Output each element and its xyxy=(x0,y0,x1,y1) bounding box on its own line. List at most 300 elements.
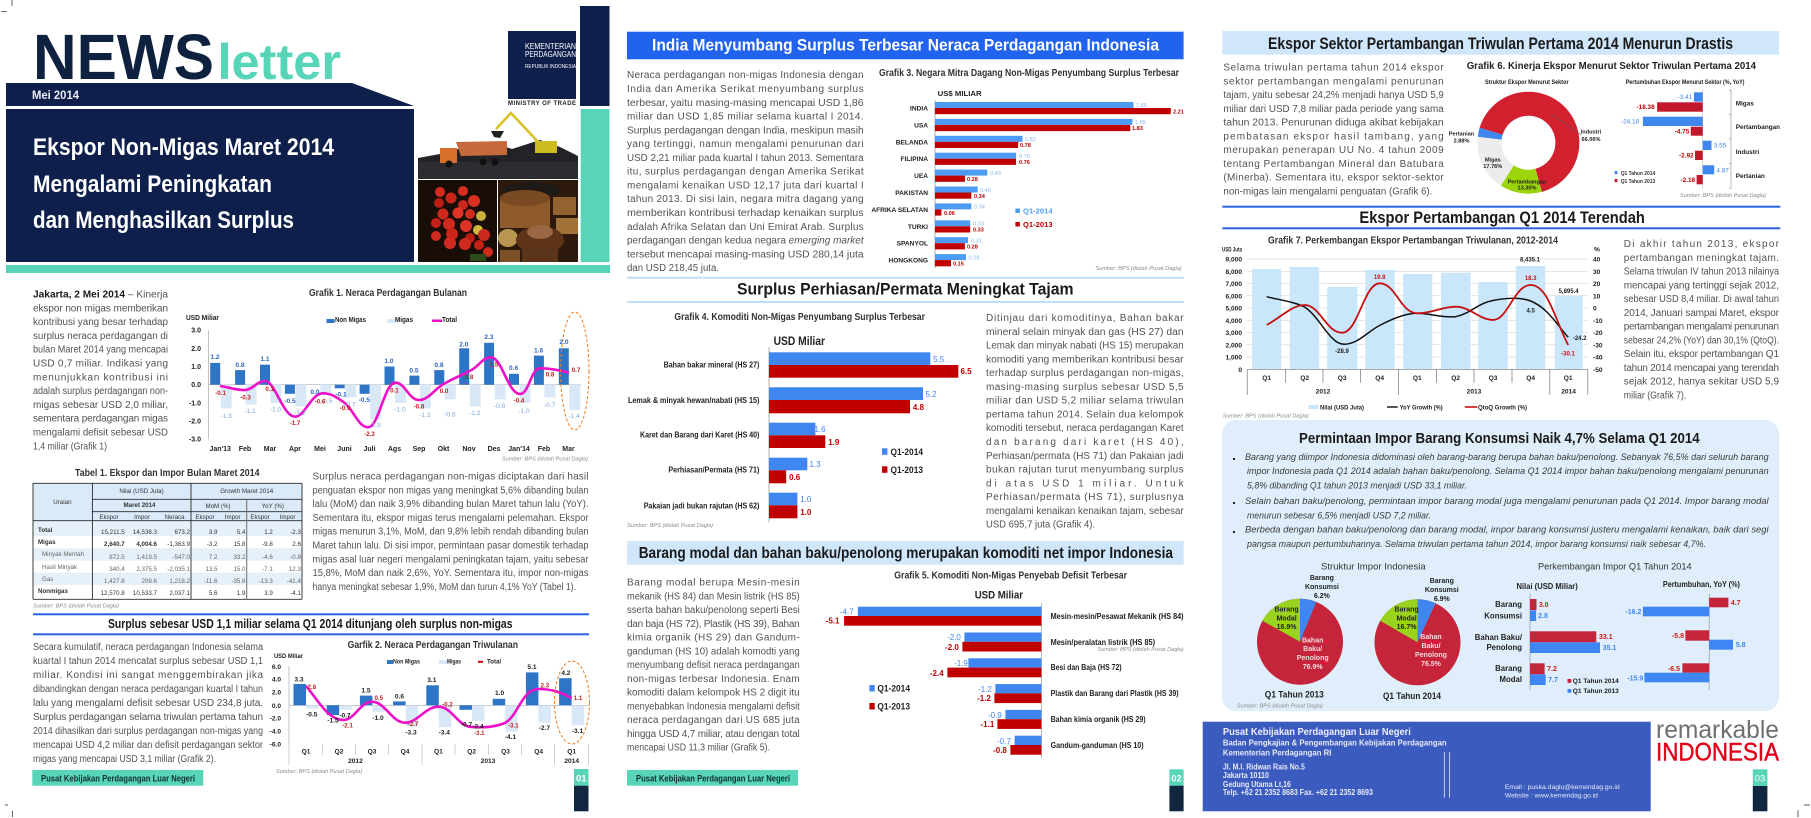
page number 02 xyxy=(1169,769,1184,811)
chart 6: export structure donut and growth bars: Pertambangan xyxy=(1508,180,1547,186)
chart 2: quarterly trade balance: Q4 xyxy=(401,748,410,756)
chart 2: quarterly trade balance: Migas xyxy=(447,658,461,666)
chart 6: export structure donut and growth bars xyxy=(1449,60,1780,199)
pie charts: import structure: Bahan xyxy=(1302,638,1323,644)
pie charts: import structure: Bahan xyxy=(1420,634,1442,641)
bar charts: import development: 7.7 xyxy=(1548,677,1558,684)
chart 4: non-migas surplus commodities: Pakaian jadi bukan rajutan (HS 62) xyxy=(644,502,760,510)
chart 3: partner countries: Q1-2013 xyxy=(1023,220,1053,229)
pie charts: import structure: 16.7% xyxy=(1397,624,1417,631)
chart 2: quarterly trade balance: -3.1 xyxy=(572,728,584,735)
chart 1: monthly trade balance: Okt xyxy=(438,446,450,453)
chart 6: export structure donut and growth bars: 4.87 xyxy=(1716,167,1729,174)
paragraph: mining sector xyxy=(1223,62,1444,197)
pie charts: import structure: 16.9% xyxy=(1277,624,1297,631)
page number 03: 03 xyxy=(1755,774,1765,784)
paragraph: partner countries: dan USD 218,45 juta. xyxy=(627,263,719,274)
chart 1: monthly trade balance: -0.8 xyxy=(494,403,506,410)
paragraph: commodities: mineral selain minyak dan gas (HS 27) dan xyxy=(986,327,1184,338)
chart 7: mining exports 2012-2014: 5,000 xyxy=(1225,306,1242,312)
paragraph: commodities: dan barang dari karet (HS 40), xyxy=(986,437,1184,448)
paragraph: capital goods: menyumbang defisit neraca perdagangan xyxy=(627,660,800,671)
chart 6: export structure donut and growth bars: Q1 Tahun 2014 xyxy=(1621,171,1656,177)
chart 3: partner countries: 0.78 xyxy=(1020,143,1031,149)
chart 5: deficit commodities: -0.9 xyxy=(988,711,1002,720)
chart 6: export structure donut and growth bars: Sumber: BPS (diolah Pusat Dagla) xyxy=(1680,193,1766,199)
chart 3: partner countries: 0.33 xyxy=(973,228,984,234)
paragraph: surplus non-migas xyxy=(312,472,589,593)
chart 1: monthly trade balance: 1.2 xyxy=(210,354,220,361)
chart 1: monthly trade balance: 0.8 xyxy=(434,362,444,369)
table 1: exports and imports March 2014: Impor xyxy=(280,514,296,521)
chart 1: monthly trade balance: -1.0 xyxy=(270,406,282,414)
paragraph: surplus non-migas: Maret tahun lalu. Di sisi impor, permintaan pasar domestik terhadap xyxy=(312,540,589,552)
page number 02: 02 xyxy=(1171,774,1182,784)
contact footer: Telp. +62 21 2352 8683 Fax. +62 21 2352 8693 xyxy=(1223,788,1373,797)
chart 1: monthly trade balance: -1.0 xyxy=(518,408,530,415)
pie charts: import structure: 6.2% xyxy=(1314,593,1331,600)
chart 2: quarterly trade balance: Total xyxy=(487,658,501,666)
chart 5: deficit commodities: -1.1 xyxy=(981,720,995,729)
paragraph: end of 2013 xyxy=(1624,239,1780,402)
chart 1: monthly trade balance: -1.1 xyxy=(244,408,256,415)
chart 1: monthly trade balance: Feb xyxy=(538,446,550,453)
table 1: exports and imports March 2014: 13.5 xyxy=(205,566,218,573)
chart 6: export structure donut and growth bars: 66.06% xyxy=(1582,137,1601,143)
banner heading: India xyxy=(627,32,1184,59)
chart 7: mining exports 2012-2014: 6,000 xyxy=(1225,293,1242,300)
bar charts: import development: Q1 Tahun 2014 xyxy=(1573,678,1619,685)
pie charts: import structure: Konsumsi xyxy=(1305,584,1339,591)
chart 7: mining exports 2012-2014: 4.5 xyxy=(1527,308,1536,314)
chart 3: partner countries: 0.06 xyxy=(944,211,955,217)
table 1: exports and imports March 2014: 14,538.3 xyxy=(133,529,158,536)
intro paragraph: migas sebesar USD 2,0 miliar, xyxy=(33,400,168,411)
chart 2: quarterly trade balance: 1.0 xyxy=(495,690,505,697)
table 1: exports and imports March 2014: 1.2 xyxy=(264,529,273,536)
table 1: exports and imports March 2014: 2,640.7 xyxy=(104,541,125,548)
paragraph: partner countries: perdagangan dengan kedua negara emerging market xyxy=(627,236,865,247)
chart 1: monthly trade balance: Mar xyxy=(562,446,575,453)
paragraph: mining sector: tentang Pertambangan Mineral dan Batubara xyxy=(1223,159,1444,170)
chart 1: monthly trade balance: -1.0 xyxy=(189,400,201,408)
chart 2: quarterly trade balance: 5.1 xyxy=(527,664,537,671)
table 1: exports and imports March 2014: Neraca xyxy=(165,514,185,521)
chart 6: export structure donut and growth bars: 3.55 xyxy=(1714,142,1727,150)
chart 5: deficit commodities: -2.0 xyxy=(945,643,959,652)
chart 2: quarterly trade balance: -2.1 xyxy=(342,722,353,730)
chart 7: mining exports 2012-2014: Nilai (USD Juta) xyxy=(1320,404,1364,412)
pie charts: import structure: 76.9% xyxy=(1303,664,1323,671)
chart 2: quarterly trade balance: -3.3 xyxy=(405,730,417,736)
pie charts: import structure: Barang xyxy=(1430,578,1454,585)
contact footer: Email : puska.daglu@kemendag.go.id xyxy=(1505,784,1620,791)
paragraph: capital goods: mencapai USD 11,3 miliar (Grafik 5). xyxy=(627,742,770,754)
pie charts: import structure: 6.9% xyxy=(1434,596,1451,603)
chart 6: export structure donut and growth bars: Migas xyxy=(1736,100,1754,108)
chart 1: monthly trade balance: -0.8 xyxy=(444,412,456,418)
chart 2: quarterly trade balance: Garfik 2. Neraca Perdagangan Triwulanan xyxy=(348,640,518,651)
table 1: exports and imports March 2014: 7.2 xyxy=(209,554,218,561)
chart 5: deficit commodities: Q1-2013 xyxy=(877,702,910,712)
paragraph: mining sector: sektor pertambangan mengalami penurunan xyxy=(1223,76,1444,87)
chart 3: partner countries: 2.21 xyxy=(1173,110,1184,116)
paragraph: capital goods: mekanik (HS 84) dan Mesin listrik (HS 85) xyxy=(627,591,800,602)
chart 7: mining exports 2012-2014: QtoQ Growth (%) xyxy=(1478,404,1527,412)
footer label page 1: Pusat Kebijakan Perdagangan Luar Negeri xyxy=(41,774,195,784)
chart 7: mining exports 2012-2014: -28.9 xyxy=(1335,349,1349,355)
chart 7: mining exports 2012-2014: -40 xyxy=(1593,355,1603,362)
banner heading: capital goods: Barang modal dan bahan baku/penolong merupakan komoditi net impor Indonesia xyxy=(639,545,1173,562)
chart 3: partner countries: TURKI xyxy=(908,224,928,231)
pie charts: import structure: Baku/ xyxy=(1421,643,1441,650)
chart 7: mining exports 2012-2014: 3,000 xyxy=(1225,330,1242,337)
table 1: exports and imports March 2014: 12.3 xyxy=(289,566,301,573)
bar charts: import development: Perkembangan Impor Q1 Tahun 2014 xyxy=(1538,562,1692,572)
chart 1: monthly trade balance: 3.0 xyxy=(191,328,201,334)
paragraph: partner countries: mengalami kenaikan USD 12,17 juta dari kuartal I xyxy=(627,180,864,191)
table 1: exports and imports March 2014: -41.4 xyxy=(287,578,301,585)
chart 1: monthly trade balance: -1.4 xyxy=(568,413,580,420)
chart 3: partner countries: 1.83 xyxy=(1132,126,1143,132)
contact footer: Website : www.kemendag.go.id xyxy=(1505,792,1598,800)
banner heading: mining exports: Ekspor Sektor Pertambangan Triwulan Pertama 2014 Menurun Drastis xyxy=(1268,35,1733,53)
chart 4: non-migas surplus commodities: Bahan bakar mineral (HS 27) xyxy=(664,360,760,370)
chart 2: quarterly trade balance xyxy=(270,640,590,775)
chart 4: non-migas surplus commodities: Q1-2013 xyxy=(890,465,923,476)
paragraph: capital goods: non-migas terbesar Indonesia. Enam xyxy=(627,674,800,685)
bar charts: import development: Pertumbuhan, YoY (%) xyxy=(1663,580,1740,589)
photo: red coffee berries xyxy=(418,180,497,262)
chart 3: partner countries: 0.29 xyxy=(968,256,979,262)
table 1: exports and imports March 2014: 1,218.2 xyxy=(169,578,191,585)
table 1: exports and imports March 2014: -35.8 xyxy=(231,578,246,585)
paragraph: cumulative balance: migas yang mencapai USD 3,1 miliar (Grafik 2). xyxy=(33,754,216,765)
chart 4: non-migas surplus commodities: Grafik 4. Komoditi Non-Migas Penyumbang Surplus Terbesar xyxy=(674,312,925,323)
chart 1: monthly trade balance: Jan'14 xyxy=(508,446,530,453)
chart 7: mining exports 2012-2014: 9,000 xyxy=(1225,256,1242,264)
chart 1: monthly trade balance: Grafik 1. Neraca Perdagangan Bulanan xyxy=(309,288,467,299)
paragraph: partner countries: yang tertinggi, namun mengalami penurunan dari xyxy=(627,139,864,150)
bar charts: import development: Penolong xyxy=(1486,643,1522,652)
chart 6: export structure donut and growth bars: -18.38 xyxy=(1637,104,1655,111)
table 1: exports and imports March 2014: -9.8 xyxy=(262,541,273,548)
chart 3: partner countries: 0.28 xyxy=(967,244,978,250)
paragraph: partner countries: tersebut mencapai masing-masing USD 280,14 juta xyxy=(627,249,864,260)
ministry logo: KEMENTERIAN xyxy=(525,41,576,51)
paragraph: capital goods: kimia organik (HS 29) dan Gandum- xyxy=(627,632,800,644)
contact footer: Jakarta 10110 xyxy=(1223,771,1269,780)
chart 7: mining exports 2012-2014: % xyxy=(1594,246,1600,254)
ministry logo: PERDAGANGAN xyxy=(525,49,576,59)
chart 6: export structure donut and growth bars: Pertumbuhan Ekspor Menurut Sektor (%, YoY) xyxy=(1626,79,1744,86)
chart 6: export structure donut and growth bars: Pertanian xyxy=(1449,132,1475,138)
chart 6: export structure donut and growth bars: Industri xyxy=(1736,149,1759,156)
chart 2: quarterly trade balance: 3.1 xyxy=(427,677,437,684)
chart 2: quarterly trade balance: -0.7 xyxy=(339,712,351,720)
chart 1: monthly trade balance: 1.6 xyxy=(534,348,544,354)
chart 1: monthly trade balance: 0.1 xyxy=(265,386,275,393)
bar charts: import development: Konsumsi xyxy=(1484,612,1522,620)
chart 7: mining exports 2012-2014: Q1 xyxy=(1262,375,1271,382)
section heading: surplus Q1 2014: Surplus sebesar USD 1,1 miliar selama Q1 2014 ditunjang oleh surplus non-migas xyxy=(108,616,512,631)
chart 3: partner countries xyxy=(871,68,1184,272)
paragraph: end of 2013: Di akhir tahun 2013, ekspor xyxy=(1624,239,1780,250)
chart 6: export structure donut and growth bars: Pertanian xyxy=(1736,173,1765,180)
chart 1: monthly trade balance: -1.2 xyxy=(294,410,306,417)
chart 3: partner countries: UEA xyxy=(914,173,928,180)
chart 4: non-migas surplus commodities: Perhiasan/Permata (HS 71) xyxy=(668,466,760,474)
paragraph: mining sector: (Minerba). Sementara itu, ekspor sektor-sektor xyxy=(1223,172,1444,184)
chart 7: mining exports 2012-2014: 0 xyxy=(1593,306,1597,312)
chart 2: quarterly trade balance: Sumber: BPS (diolah Pusat Dagla) xyxy=(276,769,362,775)
paragraph: partner countries: USD 2,21 miliar pada kuartal I tahun 2013. Sementara xyxy=(627,153,864,164)
paragraph: cumulative balance: 2014 dihasilkan dari surplus perdagangan non-migas yang xyxy=(33,726,263,737)
chart 3: partner countries: 1.85 xyxy=(1135,120,1146,126)
chart 7: mining exports 2012-2014: -10 xyxy=(1593,318,1603,325)
contact footer: Gedung Utama Lt,16 xyxy=(1223,780,1291,789)
table 1: exports and imports March 2014: 2,375.5 xyxy=(136,566,158,573)
chart 5: deficit commodities: Plastik dan Barang dari Plastik (HS 39) xyxy=(1051,689,1179,698)
chart 5: deficit commodities: Q1-2014 xyxy=(877,684,911,694)
chart 1: monthly trade balance: 0.6 xyxy=(509,365,519,372)
paragraph: cumulative balance: kuartal I tahun 2014 mencatat surplus sebesar USD 1,1 xyxy=(33,656,263,667)
table 1: exports and imports March 2014: -0.8 xyxy=(290,554,301,561)
chart 7: mining exports 2012-2014: Q3 xyxy=(1338,375,1347,382)
table 1: exports and imports March 2014: -4.6 xyxy=(262,554,273,561)
bar charts: import development: Barang xyxy=(1495,664,1522,673)
paragraph: end of 2013: pertambangan meningkat tajam. xyxy=(1624,253,1779,264)
chart 7: mining exports 2012-2014: Q1 xyxy=(1413,375,1422,382)
chart 1: monthly trade balance: USD Miliar xyxy=(186,315,219,322)
chart 1: monthly trade balance: -0.7 xyxy=(344,402,356,408)
paragraph: partner countries: miliar dan USD 1,85 miliar selama kuartal I 2014. xyxy=(627,112,864,122)
pie charts: import structure: Konsumsi xyxy=(1425,587,1459,594)
chart 4: non-migas surplus commodities: 4.8 xyxy=(913,403,925,412)
table 1: exports and imports March 2014: YoY (%) xyxy=(262,503,284,510)
chart 1: monthly trade balance: -0.5 xyxy=(359,397,370,404)
table 1: exports and imports March 2014: 1,427.8 xyxy=(104,578,125,585)
bar charts: import development: Q1 Tahun 2013 xyxy=(1573,688,1619,695)
footer label page 2: Pusat Kebijakan Perdagangan Luar Negeri xyxy=(636,774,790,784)
paragraph: mining sector: non-migas lain mengalami penguatan (Grafik 6). xyxy=(1223,186,1432,197)
chart 3: partner countries: Q1-2014 xyxy=(1023,206,1053,216)
chart 1: monthly trade balance: Feb xyxy=(239,446,251,453)
chart 1: monthly trade balance: 0.0 xyxy=(310,389,320,396)
pie charts: import structure: Q1 Tahun 2013 xyxy=(1265,690,1324,700)
chart 7: mining exports 2012-2014: YoY Growth (%) xyxy=(1400,404,1443,412)
paragraph: surplus non-migas: penguatan ekspor non migas yang meningkat 5,6% dibanding bulan xyxy=(312,485,588,496)
table 1: exports and imports March 2014: -7.1 xyxy=(262,566,273,573)
chart 3: partner countries: Sumber: BPS (diolah Pusat Dagla) xyxy=(1095,266,1182,272)
chart 1: monthly trade balance: 2.3 xyxy=(484,334,494,341)
paragraph: commodities: Ditinjau dari komoditinya, Bahan bakar xyxy=(986,313,1184,324)
masthead NEWSletter xyxy=(33,21,341,93)
ministry logo: MINISTRY OF TRADE xyxy=(508,101,576,107)
paragraph: surplus non-migas: 15,8%, MoM dan naik 2,6%, YoY. Sementara itu, impor non-migas xyxy=(312,568,588,579)
intro paragraph: kontribusi yang besar terhadap xyxy=(33,317,168,328)
paragraph: commodities: miliar dan USD 5,2 miliar selama triwulan xyxy=(986,396,1184,407)
bar charts: import development: Nilai (USD Miliar) xyxy=(1516,582,1578,591)
contact footer: Kementerian Perdagangan RI xyxy=(1223,748,1331,758)
table 1: exports and imports March 2014: 872.5 xyxy=(109,554,125,561)
paragraph: partner countries: India dan Amerika Serikat menyumbang surplus xyxy=(627,84,864,95)
table 1: exports and imports March 2014: Uraian xyxy=(53,499,72,506)
intro paragraph: surplus neraca perdagangan di xyxy=(33,331,168,342)
chart 4: non-migas surplus commodities: 1.0 xyxy=(800,495,812,504)
paragraph: mining sector: Selama triwulan pertama tahun 2014 ekspor xyxy=(1223,62,1444,74)
chart 7: mining exports 2012-2014: 2012 xyxy=(1316,388,1331,396)
table 1: exports and imports March 2014: 3.9 xyxy=(264,590,273,597)
paragraph: surplus non-migas: Surplus neraca perdagangan non-migas diciptakan dari hasil xyxy=(312,472,588,482)
chart 4: non-migas surplus commodities: 5.2 xyxy=(925,390,937,399)
pie charts: import structure: Modal xyxy=(1276,616,1297,622)
chart 4: non-migas surplus commodities: 6.5 xyxy=(960,367,972,376)
chart 3: partner countries: INDIA xyxy=(910,106,928,112)
table 1: exports and imports March 2014: 673.2 xyxy=(175,529,191,536)
headline block xyxy=(6,109,414,262)
chart 1: monthly trade balance: 0.8 xyxy=(235,362,245,369)
paragraph: partner countries: tahun 2013. Di sisi lain, negara mitra dagang yang xyxy=(627,194,864,205)
paragraph: partner countries: Neraca perdagangan non-migas Indonesia dengan xyxy=(627,70,864,81)
paragraph: capital goods: dan baja (HS 72), Plastik (HS 39), Bahan xyxy=(627,619,800,630)
chart 5: deficit commodities: -1.2 xyxy=(977,694,991,703)
intro paragraph: bulan Maret 2014 yang mencapai xyxy=(33,345,168,356)
table 1: exports and imports March 2014: Maret 2014 xyxy=(124,502,156,509)
panel: consumer goods imports xyxy=(1222,420,1779,711)
paragraph: commodities: USD 695,7 juta (Grafik 4). xyxy=(986,520,1095,531)
chart 3: partner countries: FILIPINA xyxy=(901,156,928,163)
chart 1: monthly trade balance: Nov xyxy=(462,446,476,453)
chart 2: quarterly trade balance: 6.0 xyxy=(272,664,281,671)
chart 2: quarterly trade balance: 1.1 xyxy=(574,695,583,702)
paragraph: partner countries: terbesar, yaitu masing-masing mencapai USD 1,86 xyxy=(627,98,864,109)
paragraph: surplus non-migas: lalu (MoM) dan naik 3,9% dibanding bulan Maret tahun lalu (YoY). xyxy=(312,499,588,510)
chart 1: monthly trade balance: -0.1 xyxy=(335,392,347,398)
chart 2: quarterly trade balance: -2.7 xyxy=(539,725,550,732)
paragraph: mining sector: tahun 2013. Penurunan diduga akibat kebijakan xyxy=(1223,118,1444,128)
paragraph: capital goods: ganduman (HS 10) adalah komodti yang xyxy=(627,646,800,657)
chart 6: export structure donut and growth bars: Migas xyxy=(1485,158,1501,164)
table 1: exports and imports March 2014: Ekspor xyxy=(99,514,119,521)
bar charts: import development: 33.1 xyxy=(1599,634,1613,641)
chart 4: non-migas surplus commodities: Lemak & minyak hewan/nabati (HS 15) xyxy=(628,396,760,405)
logo: remarkable indonesia: indonesia xyxy=(1656,728,1779,769)
page 2 xyxy=(627,32,1185,811)
chart 2: quarterly trade balance: Q1 xyxy=(302,748,311,756)
chart 3: partner countries: 0.31 xyxy=(971,238,982,244)
chart 6: export structure donut and growth bars: -2.92 xyxy=(1679,152,1694,160)
chart 7: mining exports 2012-2014: Q4 xyxy=(1526,375,1535,382)
paragraph: commodities: Perhiasan/permata (HS 71) dan Pakaian jadi xyxy=(986,451,1184,462)
chart 7: mining exports 2012-2014: 0 xyxy=(1238,367,1242,374)
chart 7: mining exports 2012-2014: 18.3 xyxy=(1525,276,1537,282)
banner heading: capital goods xyxy=(627,541,1184,565)
table 1: exports and imports March 2014: Sumber: BPS (diolah Pusat Dagla) xyxy=(33,604,119,610)
chart 7: mining exports 2012-2014: USD Juta xyxy=(1222,246,1242,254)
chart 2: quarterly trade balance: 4.0 xyxy=(272,676,281,684)
chart 1: monthly trade balance: -0.8 xyxy=(414,404,425,410)
banner heading: mining exports xyxy=(1222,31,1779,55)
chart 4: non-migas surplus commodities: 1.0 xyxy=(800,508,812,517)
chart 1: monthly trade balance: Mar xyxy=(264,446,276,453)
paragraph: cumulative balance: Surplus perdagangan selama triwulan pertama tahun xyxy=(33,712,263,723)
chart 7: mining exports 2012-2014: -50 xyxy=(1593,367,1603,374)
chart 1: monthly trade balance: 2.0 xyxy=(459,342,469,348)
chart 7: mining exports 2012-2014: 30 xyxy=(1593,269,1601,276)
chart 2: quarterly trade balance: 2012 xyxy=(348,758,363,765)
chart 1: monthly trade balance: -1.3 xyxy=(419,412,431,419)
chart 1: monthly trade balance: -1.0 xyxy=(394,406,406,414)
paragraph: commodities xyxy=(986,313,1185,531)
paragraph: partner countries: itu, surplus perdagangan dengan Amerika Serikat xyxy=(627,167,864,178)
chart 1: monthly trade balance: 2.0 xyxy=(191,346,201,353)
bar charts: import development: -5.8 xyxy=(1672,633,1684,640)
chart 2: quarterly trade balance: -3.1 xyxy=(508,722,519,730)
chart 1: monthly trade balance: -1.7 xyxy=(290,420,301,427)
bar charts: import development: 2.8 xyxy=(1538,613,1548,620)
chart 6: export structure donut and growth bars: Struktur Ekspor Menurut Sektor xyxy=(1485,79,1569,86)
page 3 xyxy=(1203,31,1780,811)
chart 1: monthly trade balance: 1.0 xyxy=(191,364,201,371)
table 1: exports and imports March 2014: Total xyxy=(38,527,53,534)
bar charts: import development: Barang xyxy=(1495,600,1522,609)
paragraph: mining sector: merupakan penerapan UU No. 4 tahun 2009 xyxy=(1223,145,1444,156)
chart 2: quarterly trade balance: -3.1 xyxy=(474,730,485,737)
table 1: exports and imports March 2014: -4.1 xyxy=(290,590,301,597)
chart 7: mining exports 2012-2014: -24.2 xyxy=(1573,336,1587,342)
table 1: exports and imports March 2014: -547.0 xyxy=(172,554,191,561)
table 1: exports and imports March 2014: Minyak Mentah xyxy=(42,551,85,558)
table 1: exports and imports March 2014: -13.3 xyxy=(259,578,273,585)
chart 4: non-migas surplus commodities: 1.9 xyxy=(828,438,840,447)
paragraph: commodities: mengalami kenaikan kenaikan tajam, sebesar xyxy=(986,506,1184,517)
chart 2: quarterly trade balance: 0.0 xyxy=(272,703,281,710)
chart 7: mining exports 2012-2014: 2013 xyxy=(1467,388,1482,396)
paragraph: end of 2013: sebesar USD 8,4 miliar. Di awal tahun xyxy=(1624,294,1779,305)
section heading: jewellery: Surplus Perhiasan/Permata Meningkat Tajam xyxy=(737,280,1074,298)
intro paragraph: USD 0,7 miliar. Indikasi yang xyxy=(33,358,168,370)
chart 7: mining exports 2012-2014: 5,895.4 xyxy=(1559,289,1579,295)
table 1: exports and imports March 2014: Tabel 1. Ekspor dan Impor Bulan Maret 2014 xyxy=(75,468,260,479)
table 1: exports and imports March 2014: Impor xyxy=(134,514,150,521)
paragraph: surplus non-migas: hanya meningkat sebesar 1,9%, MoM dan turun 4,1% YoY (Tabel 1). xyxy=(312,582,576,593)
table 1: exports and imports March 2014: -3.2 xyxy=(207,541,218,548)
table 1: exports and imports March 2014: 15.0 xyxy=(233,566,246,573)
chart 4: non-migas surplus commodities: 1.3 xyxy=(809,460,821,469)
chart 2: quarterly trade balance: -0.5 xyxy=(306,712,318,718)
chart 6: export structure donut and growth bars: -4.75 xyxy=(1675,128,1690,136)
bar charts: import development: 3.0 xyxy=(1539,602,1549,609)
date banner: Mei 2014 xyxy=(32,88,79,102)
section heading: lowest mining exports: Ekspor Pertambangan Q1 2014 Terendah xyxy=(1359,209,1645,227)
chart 4: non-migas surplus commodities: 1.6 xyxy=(814,425,826,434)
panel title: Permintaan Impor Barang Konsumsi Naik 4,7% Selama Q1 2014 xyxy=(1299,430,1700,447)
chart 6: export structure donut and growth bars: 17.76% xyxy=(1483,164,1502,170)
chart 7: mining exports 2012-2014: 7,000 xyxy=(1225,281,1242,288)
chart 2: quarterly trade balance: 2013 xyxy=(481,758,496,765)
intro paragraph: Jakarta, 2 Mei 2014 – Kinerja xyxy=(33,290,168,300)
contact footer: Pusat Kebijakan Perdagangan Luar Negeri xyxy=(1223,726,1411,738)
masthead NEWSletter: NEWS xyxy=(33,21,214,93)
paragraph: capital goods: neraca perdagangan dari US 685 juta xyxy=(627,715,800,726)
bullet list: Barang yang diimpor Indonesia didominasi oleh barang-barang berupa bahan baku/penolong. Sebanyak 76,5% dari seluruh barang xyxy=(1245,452,1769,463)
right navy bar xyxy=(580,6,610,106)
chart 2: quarterly trade balance: 3.3 xyxy=(294,676,304,684)
table 1: exports and imports March 2014: -2.3 xyxy=(290,529,301,536)
bullet list: pangsa maupun pertumbuhannya. Selama triwulan pertama tahun 2014, impor barang konsumsi naik sebesar 4,7%. xyxy=(1246,539,1706,550)
chart 1: monthly trade balance: Non Migas xyxy=(335,317,366,324)
